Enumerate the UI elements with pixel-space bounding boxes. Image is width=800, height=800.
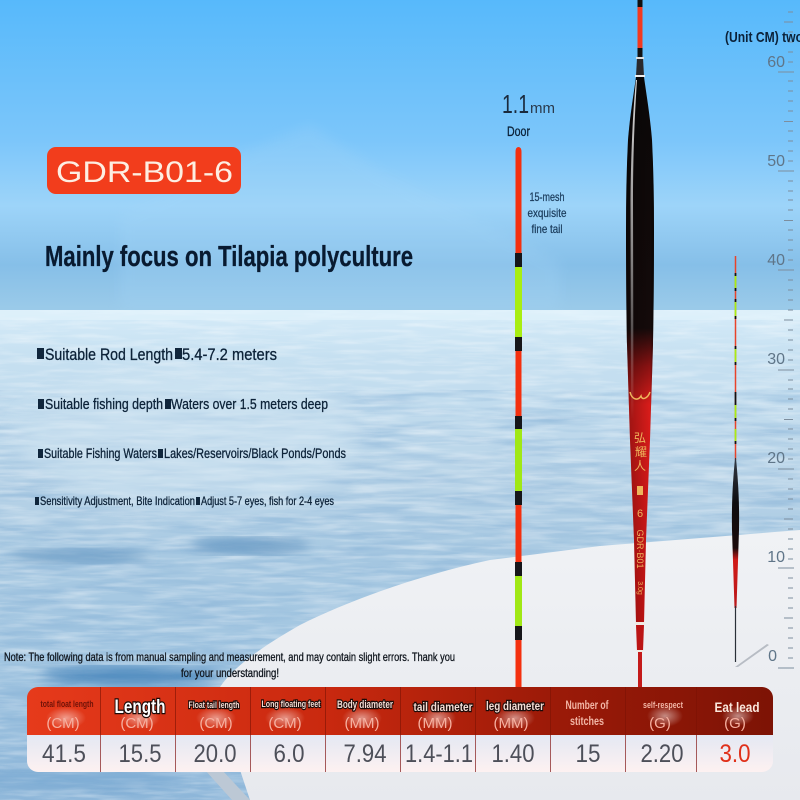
spec: fishing depth: Waters over 1.5 meters deep	[171, 396, 328, 413]
table values: 6.0	[274, 740, 304, 768]
spec table	[27, 687, 773, 772]
table values: 3.0	[720, 740, 750, 768]
float brand markings: 6	[637, 508, 643, 520]
measurement note: for your understanding!	[181, 666, 279, 680]
tail diameter label: 1.1	[502, 89, 529, 119]
table values: 20.0	[194, 740, 236, 768]
header labels: Length	[114, 697, 166, 718]
tail diameter label: mm	[530, 100, 555, 117]
background: sky	[0, 0, 800, 312]
table values: 15.5	[118, 740, 162, 768]
header labels: Long floating feet	[262, 699, 321, 710]
product model badge	[47, 147, 241, 194]
float shadow	[735, 644, 769, 667]
enlarged float tail	[515, 147, 522, 687]
spec: sensitivity	[35, 494, 334, 508]
table values	[42, 740, 750, 768]
spec: sensitivity: Sensitivity Adjustment, Bite Indication	[40, 494, 195, 508]
full-size float	[732, 256, 769, 667]
ruler	[767, 12, 794, 668]
header units: (MM)	[494, 715, 528, 732]
large float	[626, 0, 654, 687]
table header band	[27, 687, 773, 772]
float brand markings: 耀	[635, 445, 647, 459]
table values: 1.4-1.1	[405, 740, 473, 768]
header labels: Body diameter	[337, 699, 394, 711]
tail note: exquisite	[528, 206, 567, 220]
table values: 2.20	[640, 740, 684, 768]
header labels: total float length	[40, 699, 94, 709]
background: sea	[0, 308, 800, 800]
header labels	[40, 697, 760, 728]
spec: fishing depth: Suitable fishing depth	[45, 396, 163, 413]
float highlight	[630, 80, 637, 420]
header units: (MM)	[418, 715, 452, 732]
header labels: leg diameter	[486, 699, 544, 713]
header units: (CM)	[46, 715, 80, 732]
measurement note: Note: The following data is from manual sampling and measurement, and may contain slight errors. Thank you	[4, 650, 455, 664]
tail note: 15-mesh	[530, 190, 564, 204]
background: distant mountain	[120, 125, 560, 310]
spec: fishing waters: Suitable Fishing Waters	[44, 445, 157, 461]
float brand markings	[630, 392, 650, 595]
background: white ice floe	[205, 530, 800, 800]
tail diameter label: Door	[507, 123, 530, 139]
spec list	[35, 345, 346, 508]
float brand markings: 弘	[634, 431, 646, 445]
table values: 41.5	[42, 740, 86, 768]
header units: (CM)	[268, 715, 302, 732]
ruler: 50	[767, 153, 785, 170]
ruler: 40	[767, 252, 785, 269]
header labels: Float tail length	[188, 700, 240, 711]
spec: rod length: 5.4-7.2 meters	[182, 345, 277, 364]
ruler: 0	[768, 648, 777, 665]
header labels: Eat lead	[714, 699, 760, 715]
float body	[626, 77, 654, 623]
ruler: 10	[767, 549, 785, 566]
header units: (MM)	[345, 715, 379, 732]
spec: fishing waters: Lakes/Reservoirs/Black Ponds/Ponds	[164, 445, 346, 461]
float lower section	[636, 625, 644, 651]
ruler: 20	[767, 450, 785, 467]
measurement note	[4, 650, 455, 680]
float brand markings: 人	[634, 459, 646, 473]
header units: (CM)	[199, 715, 233, 732]
spec: rod length: Suitable Rod Length	[45, 345, 173, 364]
table values: 7.94	[344, 740, 387, 768]
column dividers	[100, 735, 696, 772]
header units	[46, 715, 746, 732]
table values: 1.40	[492, 740, 534, 768]
tail note: fine tail	[532, 222, 562, 236]
spec: fishing waters	[38, 445, 346, 461]
float brand markings: GDR·B01	[635, 529, 645, 569]
ruler: 30	[767, 351, 785, 368]
header units: (G)	[724, 715, 746, 732]
ruler: 60	[767, 54, 785, 71]
float brand markings: 3.0g	[636, 581, 643, 595]
header labels: Number of	[566, 698, 609, 712]
title: Mainly focus on Tilapia polyculture	[45, 241, 413, 273]
product model badge: GDR-B01-6	[56, 156, 233, 189]
float top stem	[638, 0, 642, 8]
tail diameter label	[502, 89, 555, 139]
spec: sensitivity: Adjust 5-7 eyes, fish for 2-4 eyes	[201, 494, 334, 508]
header labels: stitches	[570, 714, 604, 728]
tail note	[528, 190, 567, 236]
header labels: self-respect	[643, 700, 683, 710]
table values: 15	[576, 740, 600, 768]
header units: (G)	[649, 715, 671, 732]
spec: rod length	[37, 345, 277, 364]
spec: fishing depth	[38, 396, 328, 413]
header labels: tail diameter	[414, 700, 473, 714]
header units: (CM)	[120, 715, 154, 732]
